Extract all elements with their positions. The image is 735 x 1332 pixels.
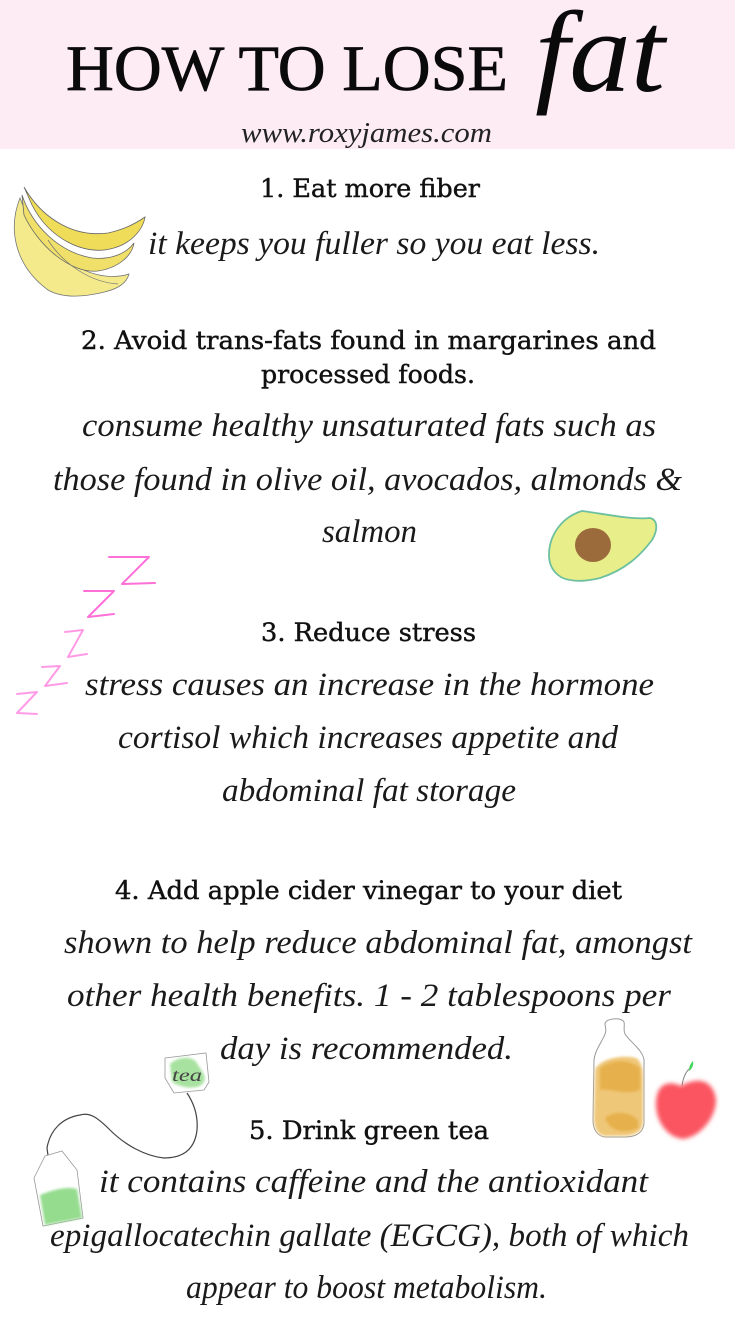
section 3: reduce stress xyxy=(85,618,654,809)
body 4: other health benefits. 1 - 2 tablespoons per xyxy=(67,978,671,1014)
section 2: avoid trans-fats xyxy=(53,326,682,550)
body 5: it contains caffeine and the antioxidant xyxy=(99,1164,649,1200)
body 2: consume healthy unsaturated fats such as xyxy=(82,408,656,444)
body 3: cortisol which increases appetite and xyxy=(118,720,619,756)
section 1: eat more fiber xyxy=(148,174,600,262)
icon: avocado xyxy=(549,511,656,581)
body 5: appear to boost metabolism. xyxy=(186,1270,547,1306)
icon: red apple xyxy=(656,1061,716,1139)
body 1: it keeps you fuller so you eat less. xyxy=(148,226,600,262)
section 4: apple cider vinegar xyxy=(64,876,693,1067)
heading 3: 3. Reduce stress xyxy=(261,618,476,647)
body 2: salmon xyxy=(322,514,417,550)
title: how to lose: HOW TO LOSE xyxy=(66,33,508,105)
body 2 xyxy=(53,408,682,550)
tea tag xyxy=(165,1053,209,1093)
icon: vinegar bottle xyxy=(593,1019,644,1137)
body 3: abdominal fat storage xyxy=(222,773,516,809)
heading 1: 1. Eat more fiber xyxy=(260,174,480,203)
body 4: day is recommended. xyxy=(220,1031,513,1067)
heading 5: 5. Drink green tea xyxy=(249,1116,489,1145)
heading 4: 4. Add apple cider vinegar to your diet xyxy=(115,876,622,905)
body 5: epigallocatechin gallate (EGCG), both of which xyxy=(50,1218,689,1254)
body 5 xyxy=(50,1164,689,1306)
heading 2: 2. Avoid trans-fats found in margarines and xyxy=(81,326,656,355)
tea tag: tea xyxy=(172,1065,202,1085)
icon: pink zzz xyxy=(17,557,155,714)
section 5: drink green tea xyxy=(50,1116,689,1306)
body 4 xyxy=(64,925,693,1067)
body 4: shown to help reduce abdominal fat, amongst xyxy=(64,925,693,961)
header band xyxy=(0,0,735,149)
tea string xyxy=(47,1093,197,1163)
body 2: those found in olive oil, avocados, almonds & xyxy=(53,462,682,498)
body 3: stress causes an increase in the hormone xyxy=(85,667,654,703)
icon: tea bag xyxy=(34,1053,209,1226)
tea pouch xyxy=(34,1151,83,1226)
website url: www.roxyjames.com xyxy=(241,117,492,149)
body 3 xyxy=(85,667,654,809)
heading 2: processed foods. xyxy=(261,360,475,389)
heading 2 xyxy=(81,326,656,389)
icon: bananas xyxy=(14,187,145,296)
